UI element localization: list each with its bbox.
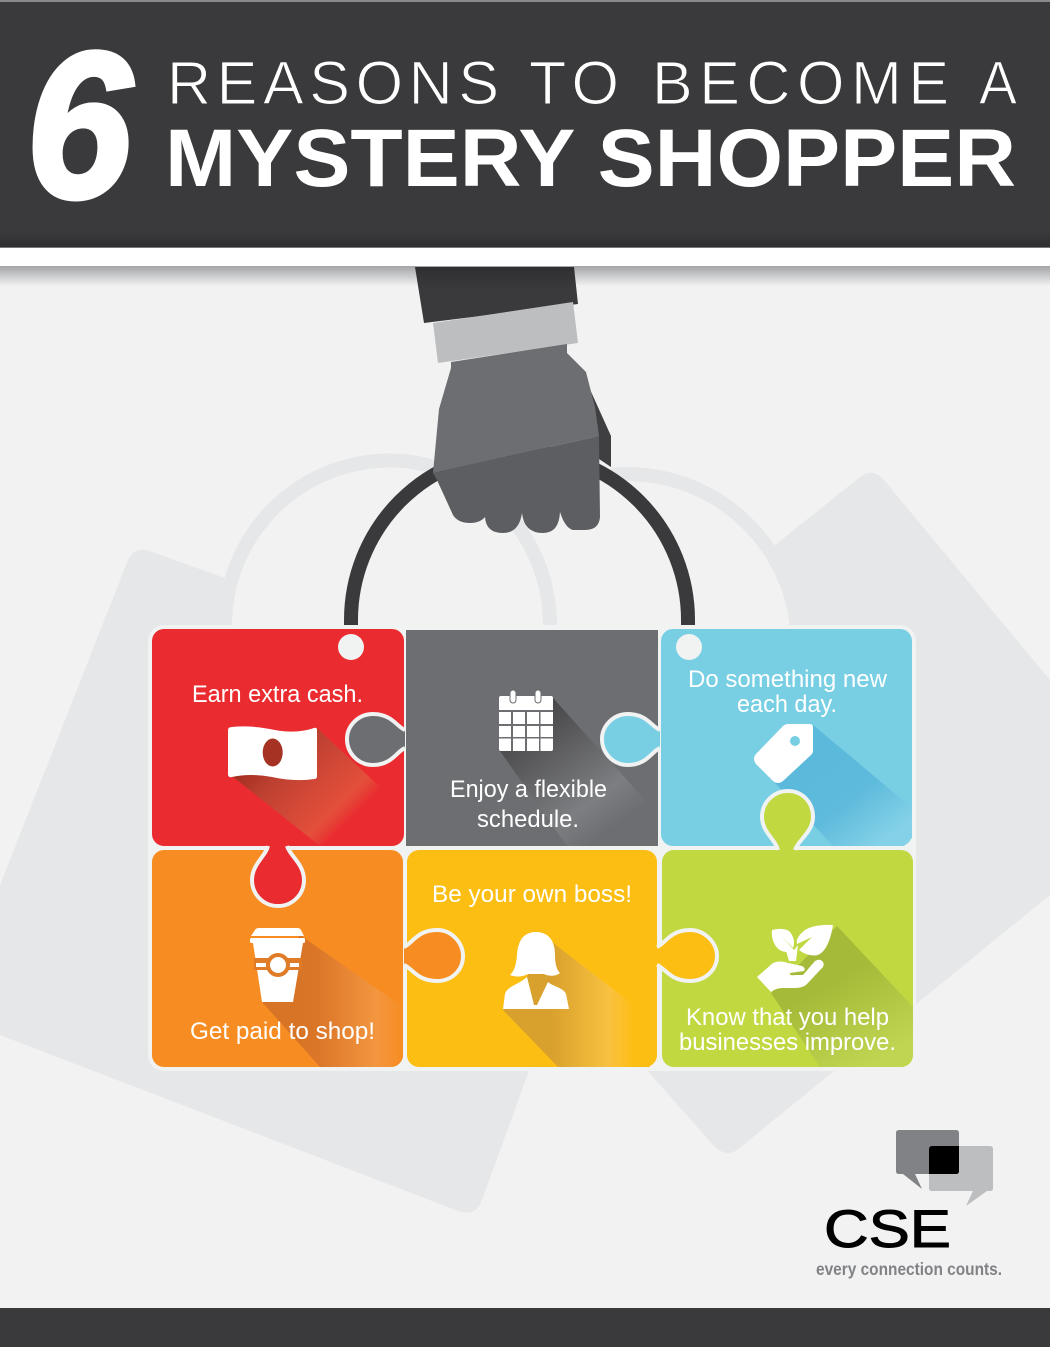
text: Get paid to shop! bbox=[190, 1018, 375, 1045]
icon: banknote bbox=[228, 726, 317, 780]
title: reasons to become a: BECOME bbox=[652, 49, 949, 117]
panel: something new (blue) bbox=[661, 629, 912, 846]
puzzle outer border bbox=[148, 625, 916, 1071]
long shadow bbox=[771, 926, 913, 1067]
text: Be your own boss! bbox=[432, 881, 632, 908]
puzzle tab: grey into red bbox=[347, 714, 405, 765]
hole bbox=[338, 634, 364, 660]
sleeve bbox=[415, 267, 578, 323]
puzzle tab: orange into yellow bbox=[404, 930, 463, 981]
long shadow bbox=[262, 935, 403, 1067]
hole bbox=[676, 634, 702, 660]
footer band bbox=[0, 1308, 1050, 1347]
text: each day. bbox=[737, 691, 837, 718]
panel: get paid to shop (orange) bbox=[152, 850, 403, 1067]
icon: businesswoman bbox=[503, 932, 569, 1009]
title: reasons to become a bbox=[167, 49, 1017, 117]
logo wordmark: CSE bbox=[824, 1200, 951, 1259]
text: businesses improve. bbox=[679, 1029, 896, 1056]
puzzle tab: red into orange bbox=[252, 846, 304, 906]
panel: be your own boss (yellow) bbox=[407, 850, 657, 1067]
panel: earn extra cash (red) bbox=[152, 629, 404, 846]
text: Do something new bbox=[688, 666, 888, 693]
title: reasons to become a: A bbox=[979, 49, 1017, 117]
tagline: every connection counts. bbox=[816, 1259, 1002, 1279]
puzzle tab: yellow into green bbox=[657, 930, 717, 981]
shirt cuff bbox=[433, 302, 578, 363]
puzzle tab: green into blue bbox=[762, 791, 813, 850]
icon: coffee cup bbox=[250, 928, 305, 1002]
big numeral 6: 6 bbox=[26, 10, 133, 242]
panel: help businesses improve (green) bbox=[662, 850, 913, 1067]
puzzle bag bbox=[148, 625, 916, 1071]
header band bbox=[0, 0, 1050, 286]
long shadow bbox=[232, 728, 383, 846]
title: reasons to become a: TO bbox=[529, 49, 619, 117]
bag handle bbox=[351, 452, 688, 626]
text: Know that you help bbox=[686, 1004, 889, 1031]
title: reasons to become a: REASONS bbox=[167, 49, 499, 117]
icon: plant in hand bbox=[757, 925, 833, 992]
long shadow bbox=[500, 698, 645, 846]
title: mystery shopper: MYSTERY SHOPPER bbox=[165, 113, 1016, 204]
puzzle tab: blue into grey bbox=[602, 714, 660, 765]
long shadow bbox=[503, 942, 650, 1067]
background watermark puzzle pieces bbox=[0, 460, 1050, 1213]
text: Enjoy a flexible bbox=[450, 776, 607, 803]
back of hand bbox=[433, 344, 599, 473]
long shadow bbox=[775, 724, 912, 846]
fingers bbox=[433, 436, 600, 533]
text: schedule. bbox=[477, 806, 579, 833]
icon: speech bubbles bbox=[896, 1130, 993, 1206]
icon: price tag bbox=[754, 724, 813, 783]
back of hand shadow bbox=[588, 385, 611, 467]
panel: flexible schedule (grey) bbox=[406, 630, 658, 846]
icon: calendar bbox=[499, 690, 553, 751]
text: Earn extra cash. bbox=[192, 681, 363, 708]
hand holding the handle bbox=[415, 267, 611, 533]
CSE logo bbox=[816, 1130, 1002, 1279]
